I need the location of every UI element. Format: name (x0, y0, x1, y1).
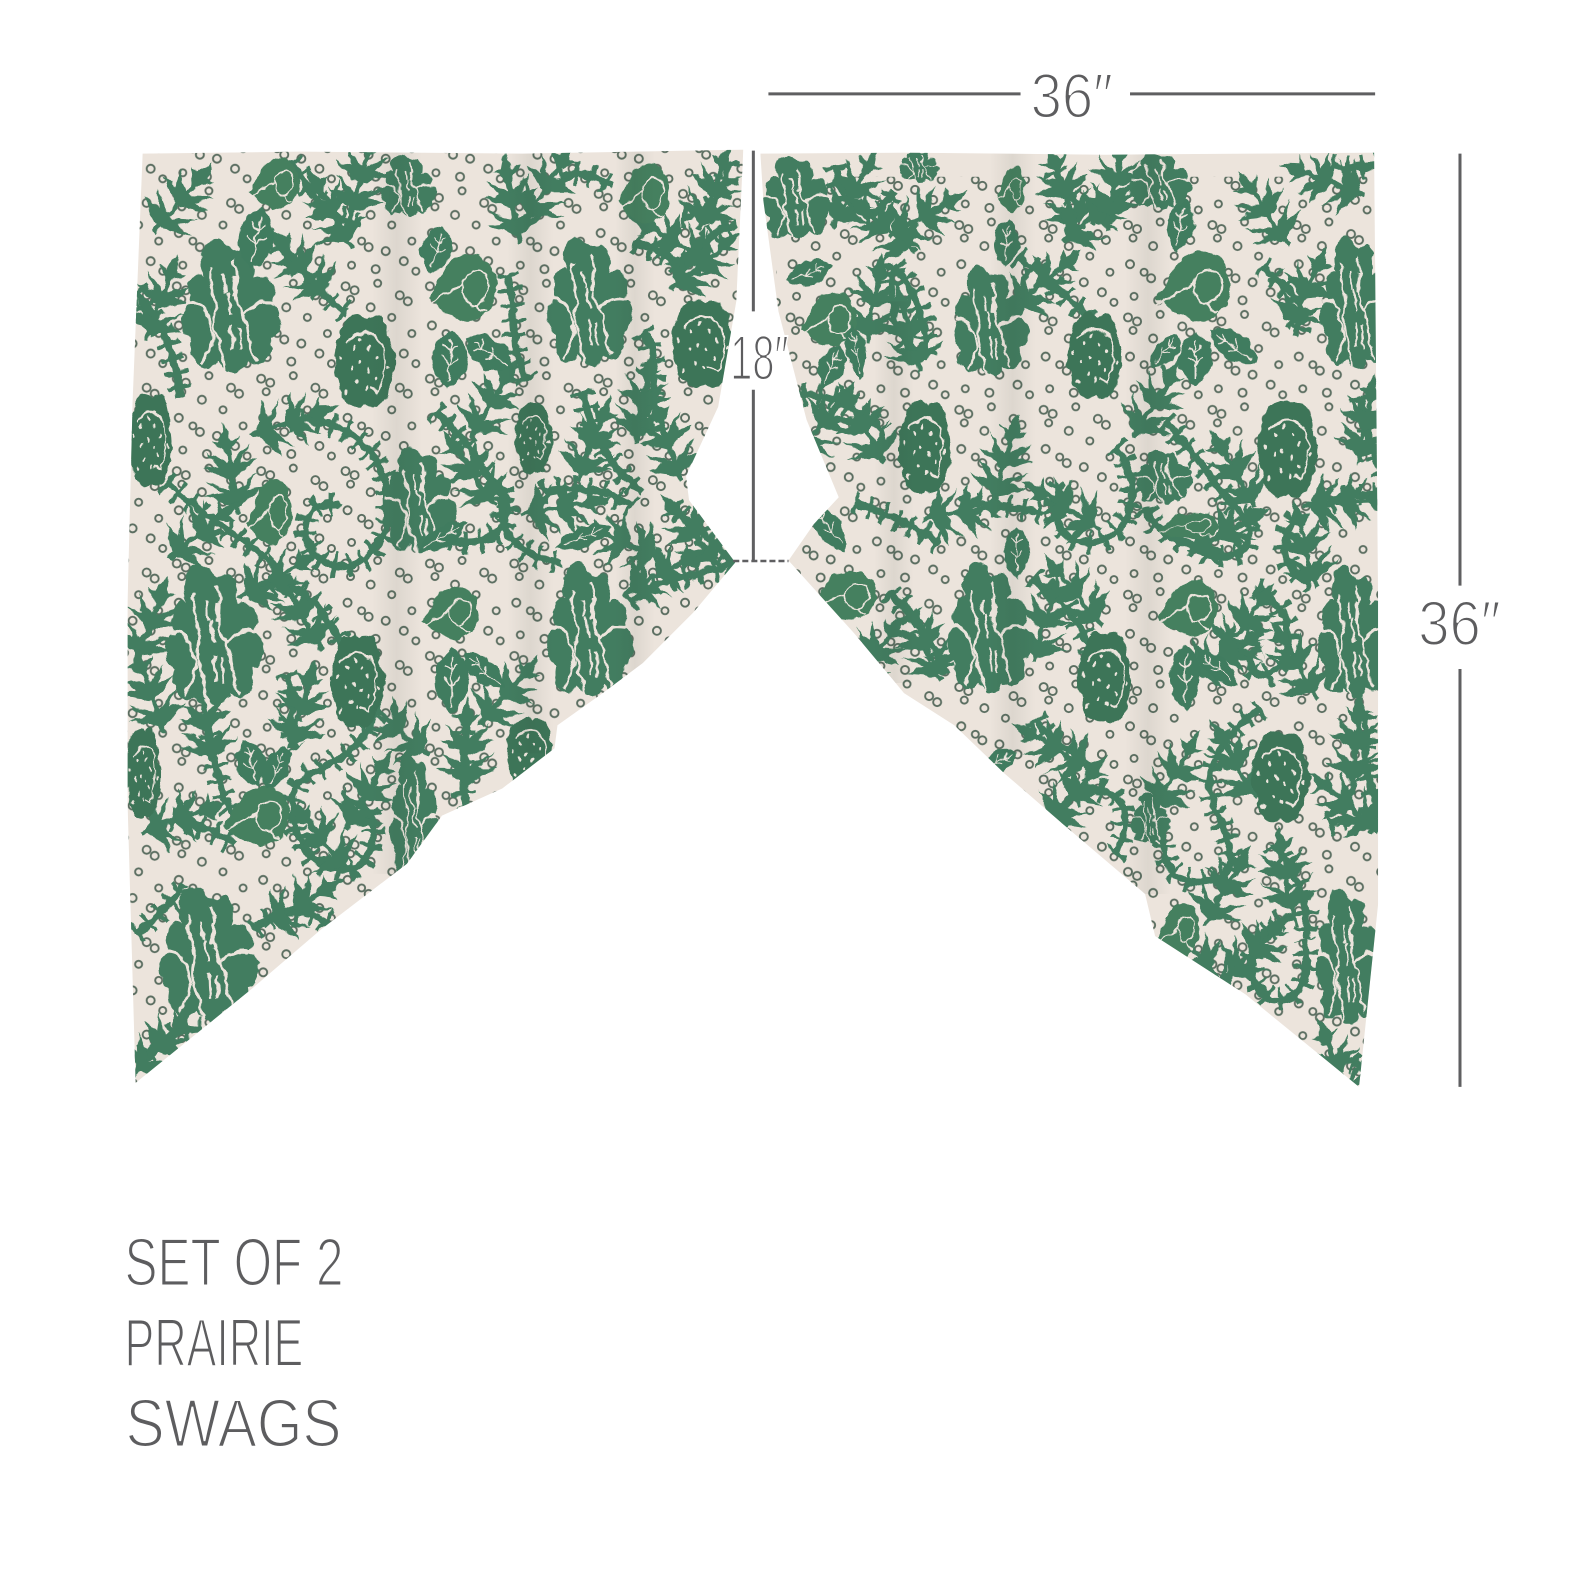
right swag curtain (760, 152, 1378, 1086)
gather shading (874, 151, 1171, 894)
product description text: SWAGS (126, 1386, 342, 1461)
dimension: side length 36 inches: 36″ (1418, 589, 1501, 659)
left curtain floral print (128, 150, 742, 1078)
right curtain floral print (762, 126, 1404, 1115)
dimension: top width 36 inches: 36″ (1031, 62, 1113, 132)
left swag curtain (128, 150, 744, 1083)
infographic canvas (128, 74, 1498, 1446)
gather shading (372, 151, 655, 874)
product description text (125, 1226, 344, 1461)
product description text: SET OF 2 (125, 1226, 344, 1301)
dimension: center drop 18 inches: 18″ (730, 324, 789, 394)
product description text: PRAIRIE (125, 1306, 303, 1381)
